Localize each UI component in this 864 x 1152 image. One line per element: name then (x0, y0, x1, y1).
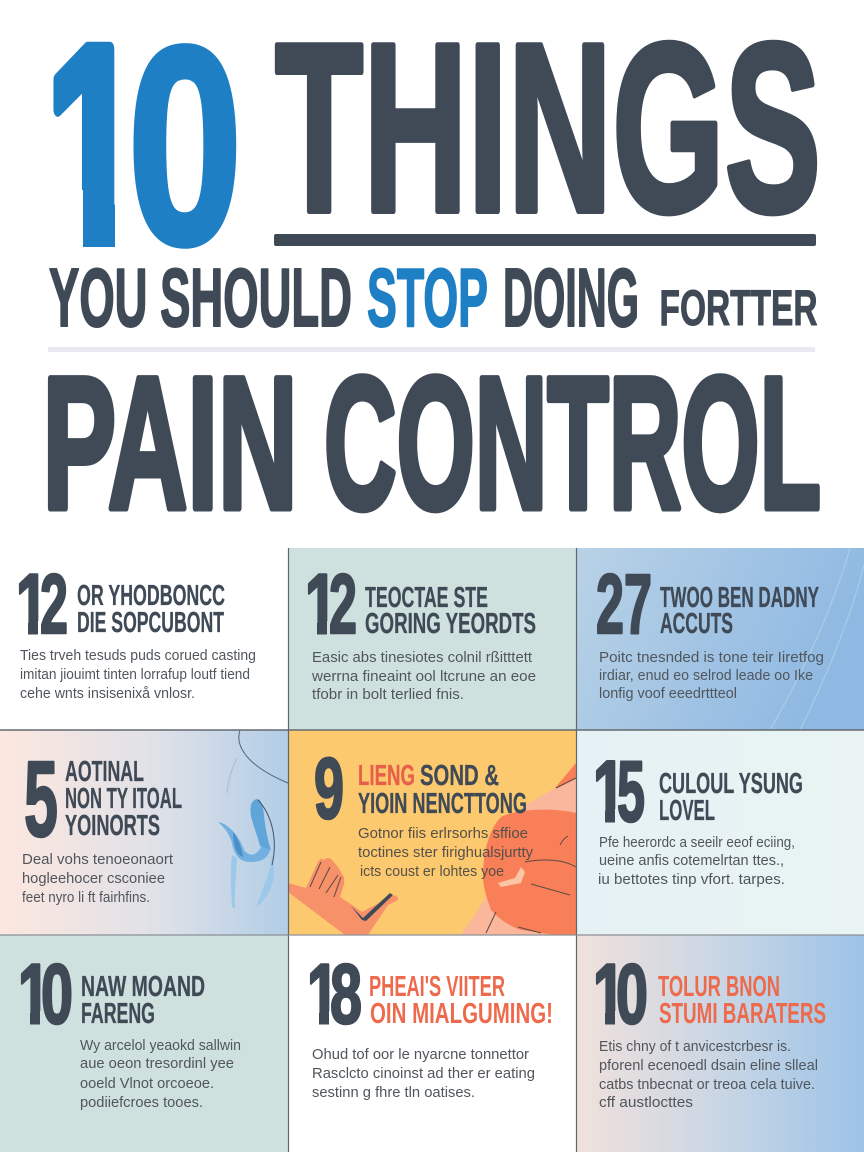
title underline (274, 234, 816, 246)
panel: item 7 (0, 935, 288, 1152)
panel: item 9 (576, 935, 864, 1152)
subtitle: you should: YOU SHOULD (49, 251, 352, 344)
number 10: 0 (616, 947, 648, 1041)
body text (22, 852, 173, 906)
body text (358, 826, 534, 880)
body text: Pfe heerordc a seeilr eeof eciing, (599, 835, 795, 851)
heading: TOLUR BNON (658, 971, 780, 1003)
number 12 (308, 572, 356, 634)
panel: item 4 (0, 730, 288, 935)
illustration: person and hand (288, 763, 576, 935)
title number: 10 (53, 42, 236, 249)
body text: irdiar, enud eo selrod leade oo Ike (599, 668, 813, 684)
number 10: 1 (593, 947, 625, 1041)
body text (312, 1047, 535, 1101)
number 12: 2 (40, 557, 68, 651)
body text: hogleehocer csconiee (22, 871, 165, 887)
body text: cehe wnts insisenixå vnlosr. (20, 686, 195, 702)
number 27: 27 (596, 557, 652, 651)
number 18: 8 (330, 947, 362, 1041)
number 15: 1 (593, 744, 625, 840)
heading: OR YHODBONCC (77, 580, 225, 612)
body text: Etis chny of t anvicestcrbesr is. (599, 1039, 791, 1055)
heading: LOVEL (659, 795, 715, 827)
heading (65, 756, 182, 842)
panel: item 8 (310, 962, 551, 1100)
number 5: 5 (24, 738, 58, 859)
heading: DIE SOPCUBONT (77, 607, 224, 639)
body text: feet nyro li ft fairhfins. (22, 890, 150, 906)
heading (365, 582, 536, 640)
panel: item 6 (576, 730, 864, 935)
heading (358, 760, 527, 820)
number 15 (596, 760, 644, 824)
panel: item 1 (18, 572, 255, 698)
heading: YOINORTS (65, 810, 160, 842)
body text: Ties trveh tesuds puds corued casting (20, 648, 256, 664)
panel: item 3 (576, 548, 864, 730)
body text (20, 648, 256, 702)
number 12: 2 (329, 557, 357, 651)
body text (599, 1039, 818, 1111)
number 12: 1 (16, 557, 48, 651)
icon: ribbon (218, 730, 288, 908)
heading: PHEAI'S VIITER (369, 971, 505, 1003)
body text: Ohud tof oor le nyarcne tonnettor (312, 1047, 529, 1063)
body text (599, 650, 824, 702)
heading (659, 768, 803, 827)
body text: Poitc tnesnded is tone teir Iiretfog (599, 650, 824, 666)
body text: imitan jiouimt tinten lorrafup loutf tiend (20, 667, 250, 683)
body text: Wy arcelol yeaokd sallwin (80, 1038, 241, 1054)
heading: FARENG (81, 998, 155, 1030)
body text: Rasclcto cinoinst ad ther er eating (312, 1066, 535, 1082)
number 12: 1 (305, 557, 337, 651)
panel: item 2 (288, 548, 576, 730)
number 15: 5 (617, 744, 645, 840)
body text: toctines ster firighualsjurtty (358, 845, 534, 861)
heading: NAW MOAND (81, 971, 205, 1003)
body text: ooeld Vlnot orcoeoe. (80, 1076, 214, 1092)
body text (598, 835, 795, 888)
heading: GORING YEORDTS (365, 608, 536, 640)
body text: pforenl ecenoedl dsain eline slleal (599, 1058, 818, 1074)
heading (658, 971, 826, 1030)
heading: AOTINAL (65, 756, 144, 788)
body text: cff austlocttes (599, 1095, 693, 1111)
body text (80, 1038, 241, 1111)
heading: NON TY ITOAL (65, 783, 182, 815)
number 12 (18, 572, 67, 634)
body text: podiiefcroes tooes. (80, 1095, 203, 1111)
title line: pain control: PAIN (43, 338, 298, 548)
heading: OIN MIALGUMING! (370, 998, 553, 1030)
heading: SOND & (420, 760, 499, 792)
title block: DOING (503, 251, 639, 344)
number 9: 9 (314, 741, 344, 837)
body text: werrna fineaint ool ltcrune an eoe (311, 669, 536, 685)
number 10 (596, 962, 646, 1026)
body text (311, 650, 536, 703)
body text: aue oeon tresordinl yee (80, 1056, 234, 1072)
heading: ACCUTS (660, 608, 733, 640)
body text: Easic abs tinesiotes colnil rßitttett (312, 650, 532, 666)
subtitle divider (48, 347, 815, 352)
subtitle: stop: STOP (367, 251, 488, 344)
heading: LIENG (358, 760, 415, 792)
body text: icts coust er lohtes yoe (360, 864, 504, 880)
heading (369, 971, 553, 1030)
body text: ueine anfis cotemelrtan ttes., (599, 853, 784, 869)
heading (660, 582, 819, 640)
number 10: 1 (18, 947, 50, 1041)
body text: tfobr in bolt terlied fnis. (312, 687, 464, 703)
panel: item 5 (288, 730, 576, 935)
body text: sestinn g fhre tln oatises. (312, 1085, 475, 1101)
title line: pain control (43, 338, 821, 548)
heading (77, 580, 225, 639)
body text: Deal vohs tenoeonaort (22, 852, 173, 868)
number 10 (20, 962, 72, 1026)
title block (48, 40, 820, 514)
body text: lonfig voof eeedrttteol (599, 686, 737, 702)
body text: iu bettotes tinp vfort. tarpes. (598, 872, 785, 888)
body text: catbs tnbecnat or treoa cela tuive. (599, 1077, 815, 1093)
number 18: 1 (307, 947, 339, 1041)
heading: TEOCTAE STE (365, 582, 488, 614)
number 10: 0 (41, 947, 73, 1041)
number 18 (310, 962, 362, 1026)
heading: YIOIN NENCTTONG (358, 788, 527, 820)
body text: Gotnor fiis erlrsorhs sffioe (358, 826, 528, 842)
heading (81, 971, 205, 1030)
